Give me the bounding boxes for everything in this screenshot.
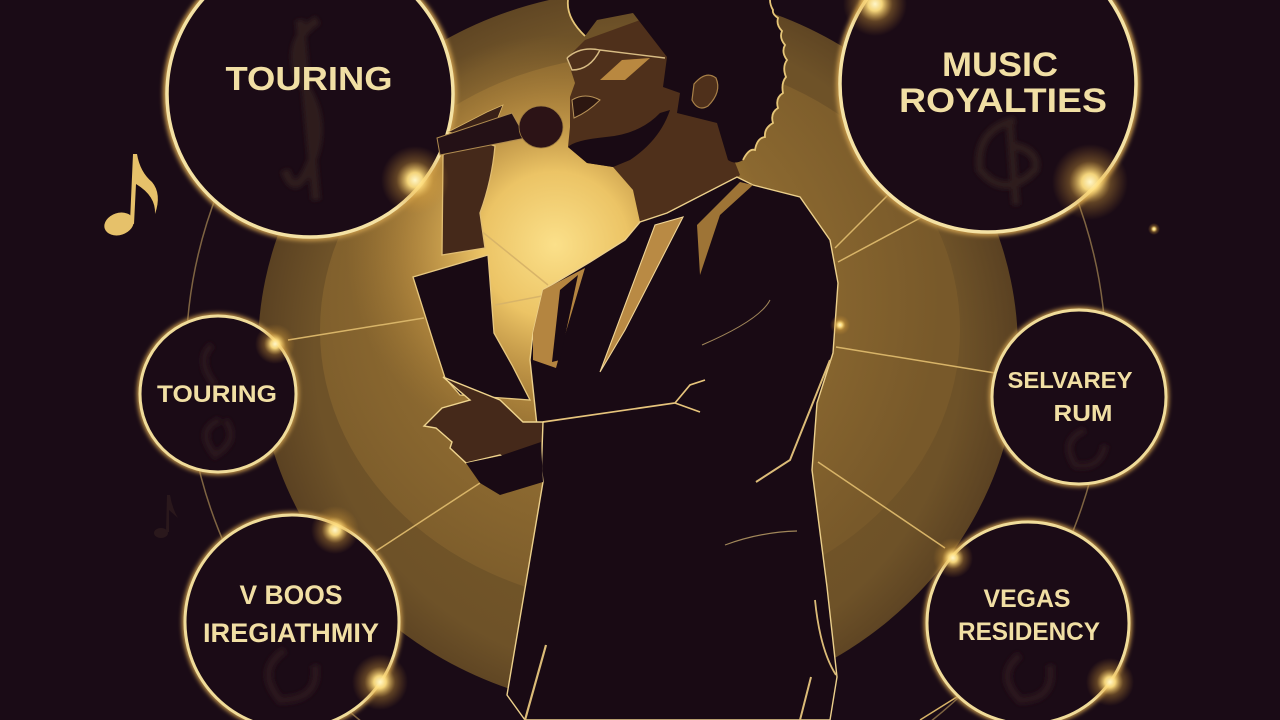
node: selvarey rum: RUM <box>1054 400 1112 426</box>
icon: music note <box>101 154 158 239</box>
hand on chest <box>424 377 543 478</box>
label: SELVAREY <box>1008 367 1132 393</box>
node: music royalties <box>840 0 1136 232</box>
fingers <box>448 105 503 136</box>
glasses <box>567 49 665 70</box>
node: vegas residency <box>927 522 1129 720</box>
ear <box>692 75 718 108</box>
beard <box>568 110 670 167</box>
hair <box>568 0 787 162</box>
lips <box>572 96 600 118</box>
jacket seam highlights <box>525 300 836 720</box>
face highlight <box>600 58 650 80</box>
raised sleeve <box>413 255 530 400</box>
clef watermark <box>1008 655 1051 700</box>
label: MUSIC <box>942 46 1058 84</box>
node: touring small <box>140 316 296 472</box>
forearm crossed line <box>543 380 705 422</box>
node: touring large <box>167 0 453 237</box>
icon: faint music note <box>154 495 178 538</box>
node: music royalties: ROYALTIES <box>899 82 1107 120</box>
glowing flares <box>255 0 1160 710</box>
clef watermark <box>1069 430 1105 466</box>
label: TOURING <box>157 381 277 408</box>
neck and face <box>567 20 740 240</box>
clef watermark <box>285 20 318 200</box>
clef watermark <box>269 650 316 700</box>
clef watermark <box>979 120 1036 205</box>
lapels <box>533 268 585 368</box>
label: TOURING <box>226 60 392 97</box>
jacket dark stripe <box>552 275 578 362</box>
connector lines <box>288 195 995 720</box>
cuff <box>466 442 543 495</box>
node: bottom left <box>185 515 399 720</box>
microphone <box>437 105 563 155</box>
concentric stage discs <box>186 0 1106 720</box>
label: VEGAS <box>984 585 1070 613</box>
label: V BOOS <box>240 580 342 610</box>
singer figure <box>413 0 838 720</box>
node: vegas residency: RESIDENCY <box>958 618 1100 646</box>
jacket body <box>507 177 838 720</box>
hair rim light <box>568 0 787 160</box>
clef watermark <box>204 345 231 455</box>
node: selvarey rum <box>992 310 1166 484</box>
node: bottom left: IREGIATHMIY <box>203 618 379 648</box>
arm holding microphone <box>442 138 495 255</box>
